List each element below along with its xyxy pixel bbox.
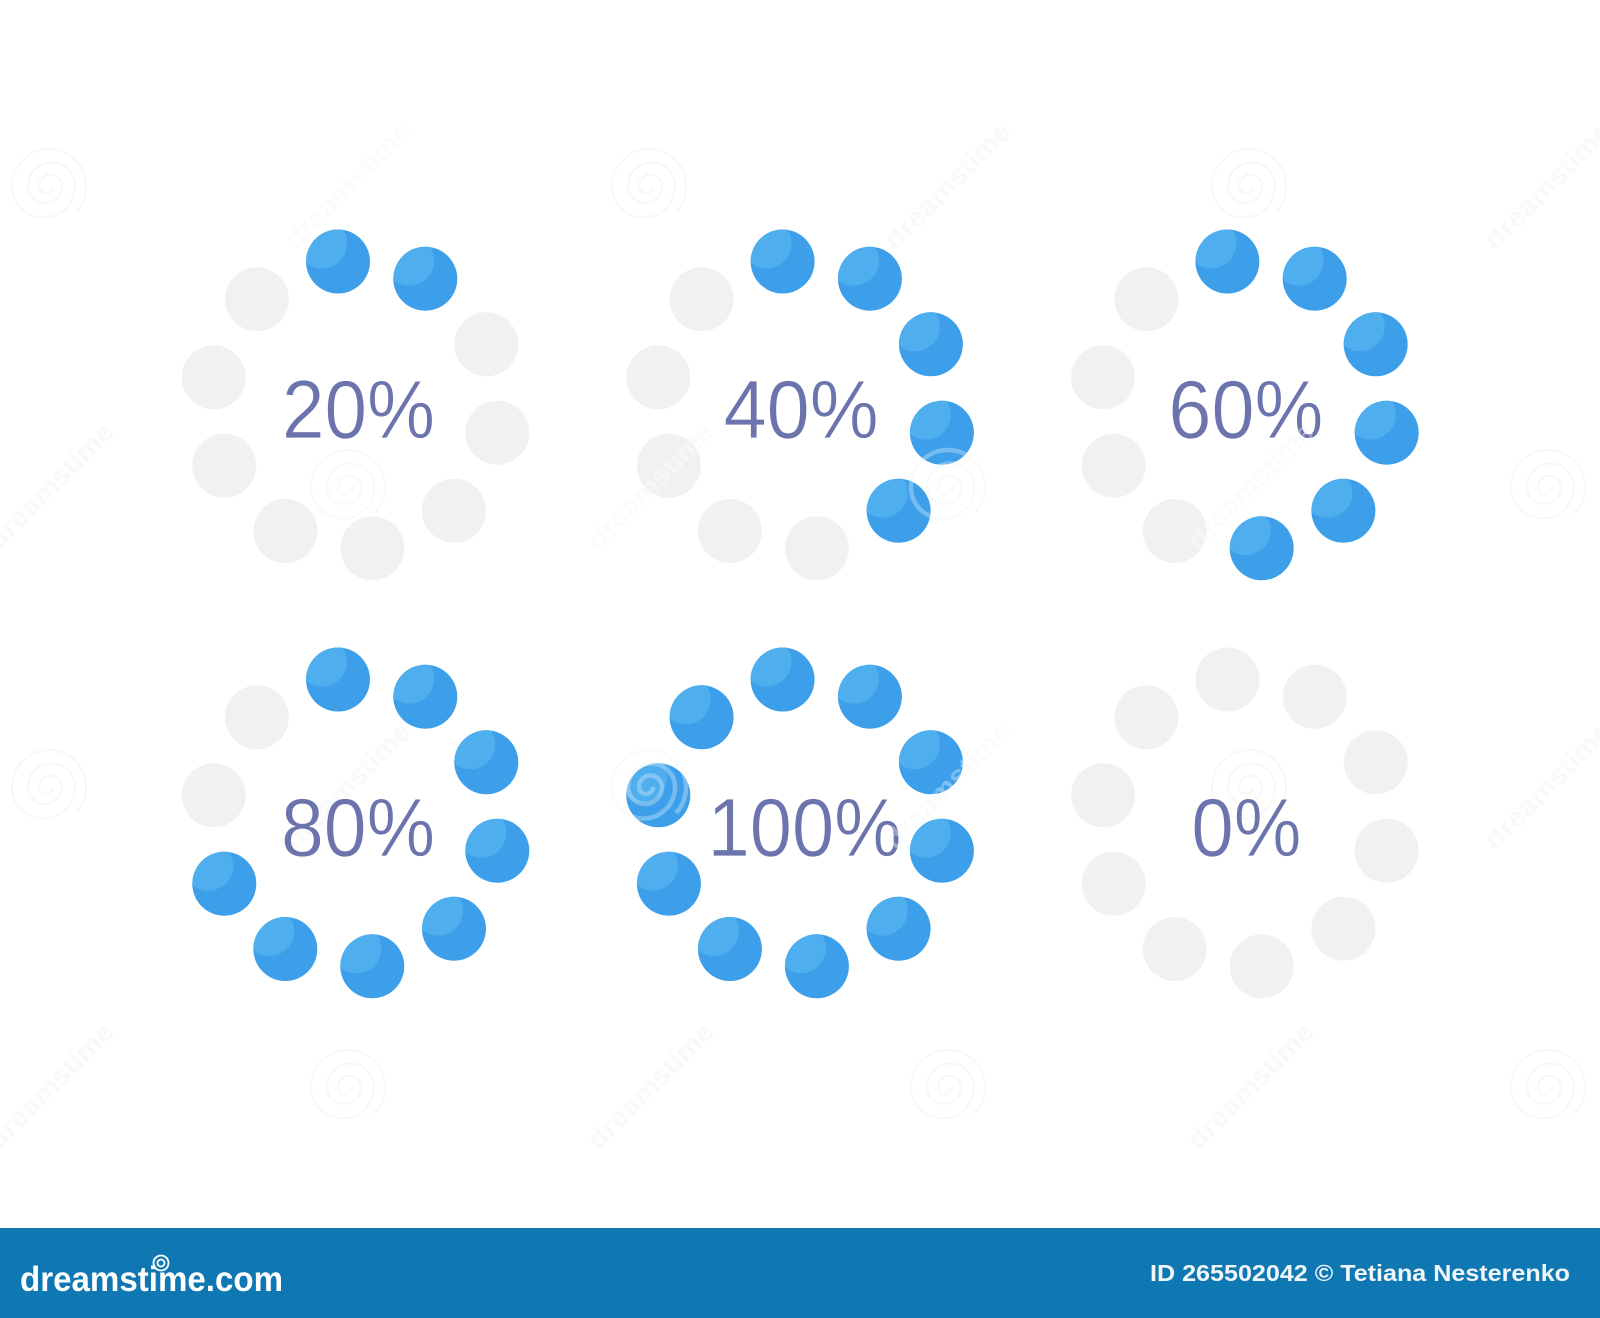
panel: 60% loader (1071, 218, 1419, 580)
watermark layer: dreamstime (878, 116, 1017, 255)
label: 40%: 40% (724, 363, 879, 456)
footer banner (0, 1228, 1600, 1318)
panel: 40% loader (626, 218, 974, 580)
panel: 0% loader (1071, 648, 1419, 998)
watermark overlay on dots: dreamstime (1181, 416, 1320, 555)
watermark layer: dreamstime (278, 116, 417, 255)
label: 60%: 60% (1168, 363, 1323, 456)
logo text: dreamstime.com (20, 1260, 283, 1299)
watermark overlay on dots: dreamstime (278, 116, 417, 255)
watermark overlay on dots (278, 116, 1320, 855)
panel: 80% loader (182, 636, 529, 998)
watermark layer (0, 116, 1600, 1155)
panel: 100% loader (617, 636, 974, 998)
label: 20%: 20% (282, 363, 435, 456)
watermark layer: dreamstime (878, 716, 1017, 855)
credit text: ID 265502042 © Tetiana Nesterenko (1150, 1260, 1570, 1286)
panel: 20% loader (182, 218, 529, 580)
label: 0%: 0% (1191, 781, 1301, 874)
watermark layer: dreamstime (278, 716, 417, 855)
label: 100%: 100% (708, 781, 902, 874)
watermark overlay on dots: dreamstime (878, 716, 1017, 855)
icon: logo spiral (154, 1256, 168, 1270)
watermark layer: dreamstime (581, 416, 720, 555)
watermark layer: dreamstime (1181, 416, 1320, 555)
label: 80%: 80% (281, 781, 435, 874)
watermark layer: dreamstime (581, 1016, 720, 1155)
watermark layer: dreamstime (1181, 1016, 1320, 1155)
watermark overlay on dots: dreamstime (581, 416, 720, 555)
